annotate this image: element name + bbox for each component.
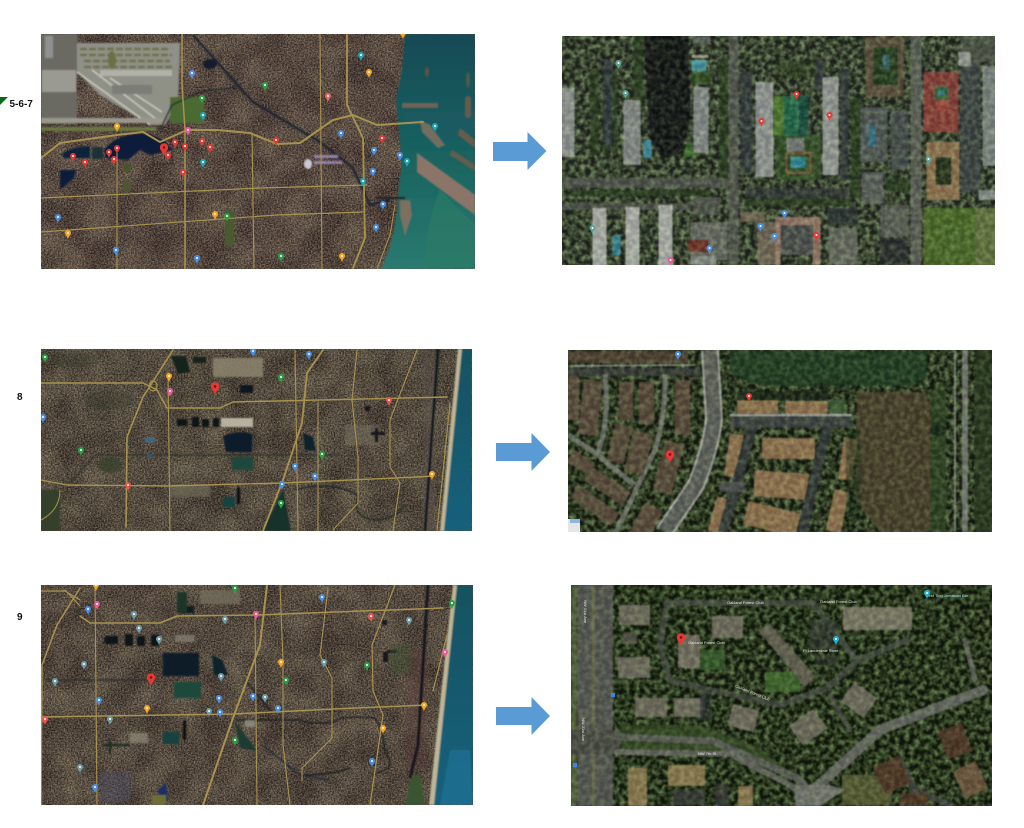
marker: green triangle xyxy=(0,97,8,105)
surface texture xyxy=(561,35,996,266)
map pins xyxy=(40,348,435,509)
arrow: row 3 xyxy=(496,697,550,735)
intersection plaza xyxy=(795,785,845,806)
map pins xyxy=(42,582,455,793)
streets and parking xyxy=(561,35,921,266)
parking lanes xyxy=(720,400,852,532)
land base xyxy=(41,349,472,531)
plaza and restaurants xyxy=(688,212,820,265)
map: close-up of Oakland Forest Club xyxy=(571,585,992,806)
residential roads xyxy=(617,603,983,805)
main curved road xyxy=(568,350,714,532)
ocean and bay xyxy=(381,34,475,269)
map: Miami close-up of apartment blocks xyxy=(562,36,995,265)
street labels: Oakland Forest Club xyxy=(688,640,725,645)
tennis court xyxy=(773,96,808,152)
street labels: NW 31st Ave xyxy=(581,718,586,742)
right edge buildings xyxy=(958,36,996,200)
lawns xyxy=(571,585,892,806)
red roof buildings xyxy=(923,72,958,132)
arrow: row 1 xyxy=(493,132,546,170)
pale development patches xyxy=(170,358,380,497)
urban base xyxy=(41,34,475,269)
lakes and ponds xyxy=(46,592,397,805)
lakes and ponds xyxy=(70,356,405,531)
street labels: Oakland Forest Club xyxy=(820,599,857,604)
ocean and beach xyxy=(423,349,472,531)
dark brown roofs xyxy=(873,722,988,807)
highways and arterial roads xyxy=(41,34,423,269)
brush field xyxy=(855,350,992,532)
map pins xyxy=(55,30,438,264)
brown courtyard building xyxy=(865,37,903,97)
ground base xyxy=(568,350,992,532)
street labels: Best Ting Jamaican Bar xyxy=(926,593,969,598)
driveways xyxy=(673,620,840,805)
dark green areas xyxy=(41,352,135,531)
swimming pools xyxy=(612,55,874,255)
pale patches xyxy=(100,590,412,802)
left brown townhouses xyxy=(566,351,690,542)
lakes and canal xyxy=(60,35,405,246)
label: 5-6-7: 5-6-7 xyxy=(10,98,33,110)
grass field xyxy=(923,208,996,266)
service road xyxy=(954,350,968,532)
gray roof buildings xyxy=(618,605,912,745)
residential streets xyxy=(568,374,665,532)
tan roofs xyxy=(628,765,753,806)
ocean and beach xyxy=(405,585,473,805)
map: Broward wide satellite view one xyxy=(41,349,472,531)
highways and arterial roads xyxy=(41,585,447,805)
street labels: Oakland Forest Club xyxy=(735,683,771,702)
arrow: row 2 xyxy=(496,433,550,471)
ground base xyxy=(561,35,996,266)
map: Miami wide satellite view xyxy=(41,34,475,269)
surface texture xyxy=(568,350,992,532)
street labels: Ft Lauderdale Store xyxy=(803,648,839,653)
islands and port xyxy=(400,67,475,236)
street labels: Oakland Forest Club xyxy=(727,600,764,605)
map: close-up of townhouse community xyxy=(568,350,992,532)
land base xyxy=(41,585,473,805)
highways and arterial roads xyxy=(41,350,450,531)
map pins xyxy=(666,351,752,463)
map pins xyxy=(589,60,931,266)
street labels xyxy=(581,593,969,756)
map: Broward wide satellite view two xyxy=(41,585,473,805)
map pins xyxy=(573,590,930,767)
dark tree line xyxy=(737,383,946,520)
main avenue xyxy=(570,585,620,806)
label: 9: 9 xyxy=(17,612,23,623)
pond xyxy=(730,351,927,386)
surface texture xyxy=(571,585,992,806)
lake xyxy=(643,35,690,158)
corner inset xyxy=(568,519,580,532)
tan roof building xyxy=(926,142,959,200)
tan roof apartments xyxy=(708,400,858,537)
street labels: NW 31st Ave xyxy=(583,600,588,624)
label: 8: 8 xyxy=(17,392,23,403)
street labels: NW 7th St xyxy=(698,751,717,756)
tree rows and lawns xyxy=(570,35,921,206)
tree canopy base xyxy=(571,585,992,806)
airport xyxy=(41,34,204,131)
apartment buildings xyxy=(561,36,908,266)
